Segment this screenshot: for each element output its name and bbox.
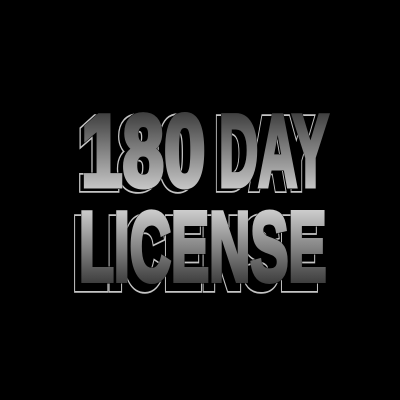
headline line 1: 180 DAY: 180 — [78, 99, 198, 210]
headline line 1: 180 DAY: 180 — [81, 93, 206, 208]
headline line 1: 180 DAY: 180 — [81, 93, 206, 208]
headline line 1: 180 DAY: 180 — [78, 99, 198, 210]
